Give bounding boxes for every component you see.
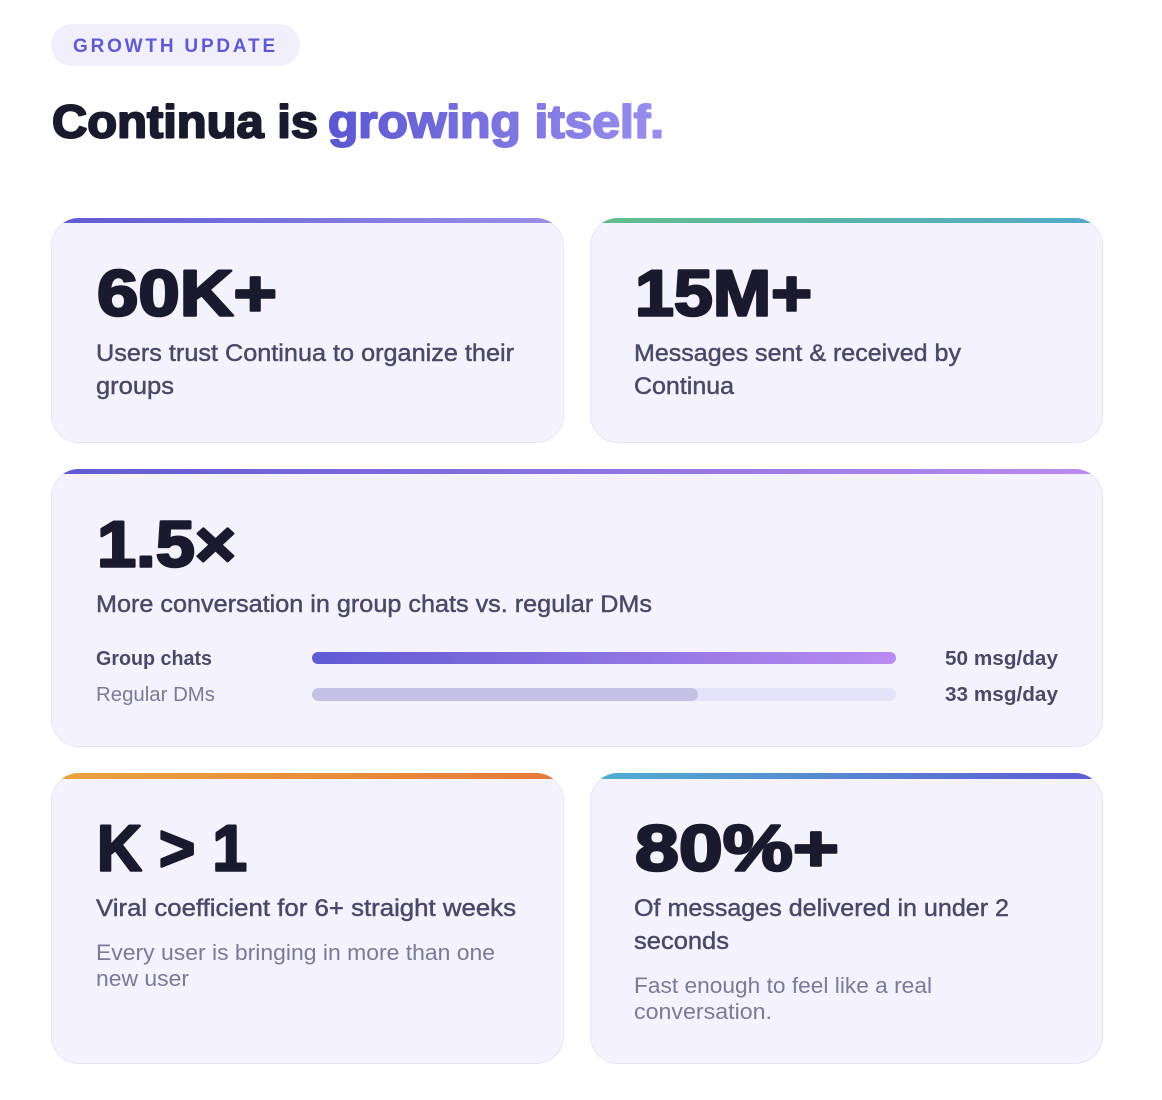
description: delivery: seconds	[634, 928, 729, 955]
bar chart: messages per day	[96, 648, 1059, 706]
description: delivery	[634, 895, 1009, 955]
description: users: groups	[96, 373, 174, 400]
stat: K > 1: K > 1	[97, 812, 247, 884]
note: new users: new user	[96, 966, 189, 991]
panel: 60K+ users	[51, 218, 564, 443]
stat: 1.5x: 1.5×	[97, 508, 236, 580]
note: speed: conversation.	[634, 999, 772, 1024]
accent bar: purple to violet	[51, 469, 1103, 474]
bar row: regular DMs	[96, 684, 1059, 706]
note: speed: Fast enough to feel like a real	[634, 973, 932, 998]
accent bar: purple	[51, 218, 564, 223]
note: speed	[634, 973, 932, 1024]
description: users: Users trust Continua to organize their	[96, 340, 514, 367]
bar row: regular DMs: Regular DMs	[96, 684, 215, 706]
stat: 60K+: 60K+	[97, 256, 277, 330]
panel: 1.5x conversation	[51, 469, 1103, 747]
note: new users: Every user is bringing in more than one	[96, 940, 495, 965]
stat: 80%+: 80%+	[635, 812, 839, 884]
panel: K > 1 viral coefficient	[51, 773, 564, 1064]
description: viral coefficient: Viral coefficient for 6+ straight weeks	[96, 895, 516, 922]
accent bar: orange	[51, 773, 564, 779]
accent bar: green to teal	[590, 218, 1103, 223]
badge: growth update: GROWTH UPDATE	[73, 36, 278, 57]
title	[52, 96, 664, 148]
badge: growth update	[51, 24, 300, 66]
description: users	[96, 340, 514, 400]
bar row: group chats: Group chats	[96, 648, 212, 670]
bar row: group chats: 50 msg/day	[945, 648, 1059, 670]
bar row: regular DMs: 33 msg/day	[945, 684, 1059, 706]
description: conversation: More conversation in group chats vs. regular DMs	[96, 591, 652, 618]
panel: 15M+ messages	[590, 218, 1103, 443]
description: delivery: Of messages delivered in under 2	[634, 895, 1009, 922]
title: growing itself.	[328, 96, 664, 148]
description: messages: Continua	[634, 373, 735, 400]
description: messages: Messages sent & received by	[634, 340, 961, 367]
description: messages	[634, 340, 961, 400]
panel: 80%+ delivery speed	[590, 773, 1103, 1064]
note: new users	[96, 940, 495, 991]
accent bar: teal to purple	[590, 773, 1103, 779]
bar row: group chats	[96, 648, 1059, 670]
title: Continua is	[52, 96, 318, 148]
stat: 15M+: 15M+	[635, 256, 812, 330]
